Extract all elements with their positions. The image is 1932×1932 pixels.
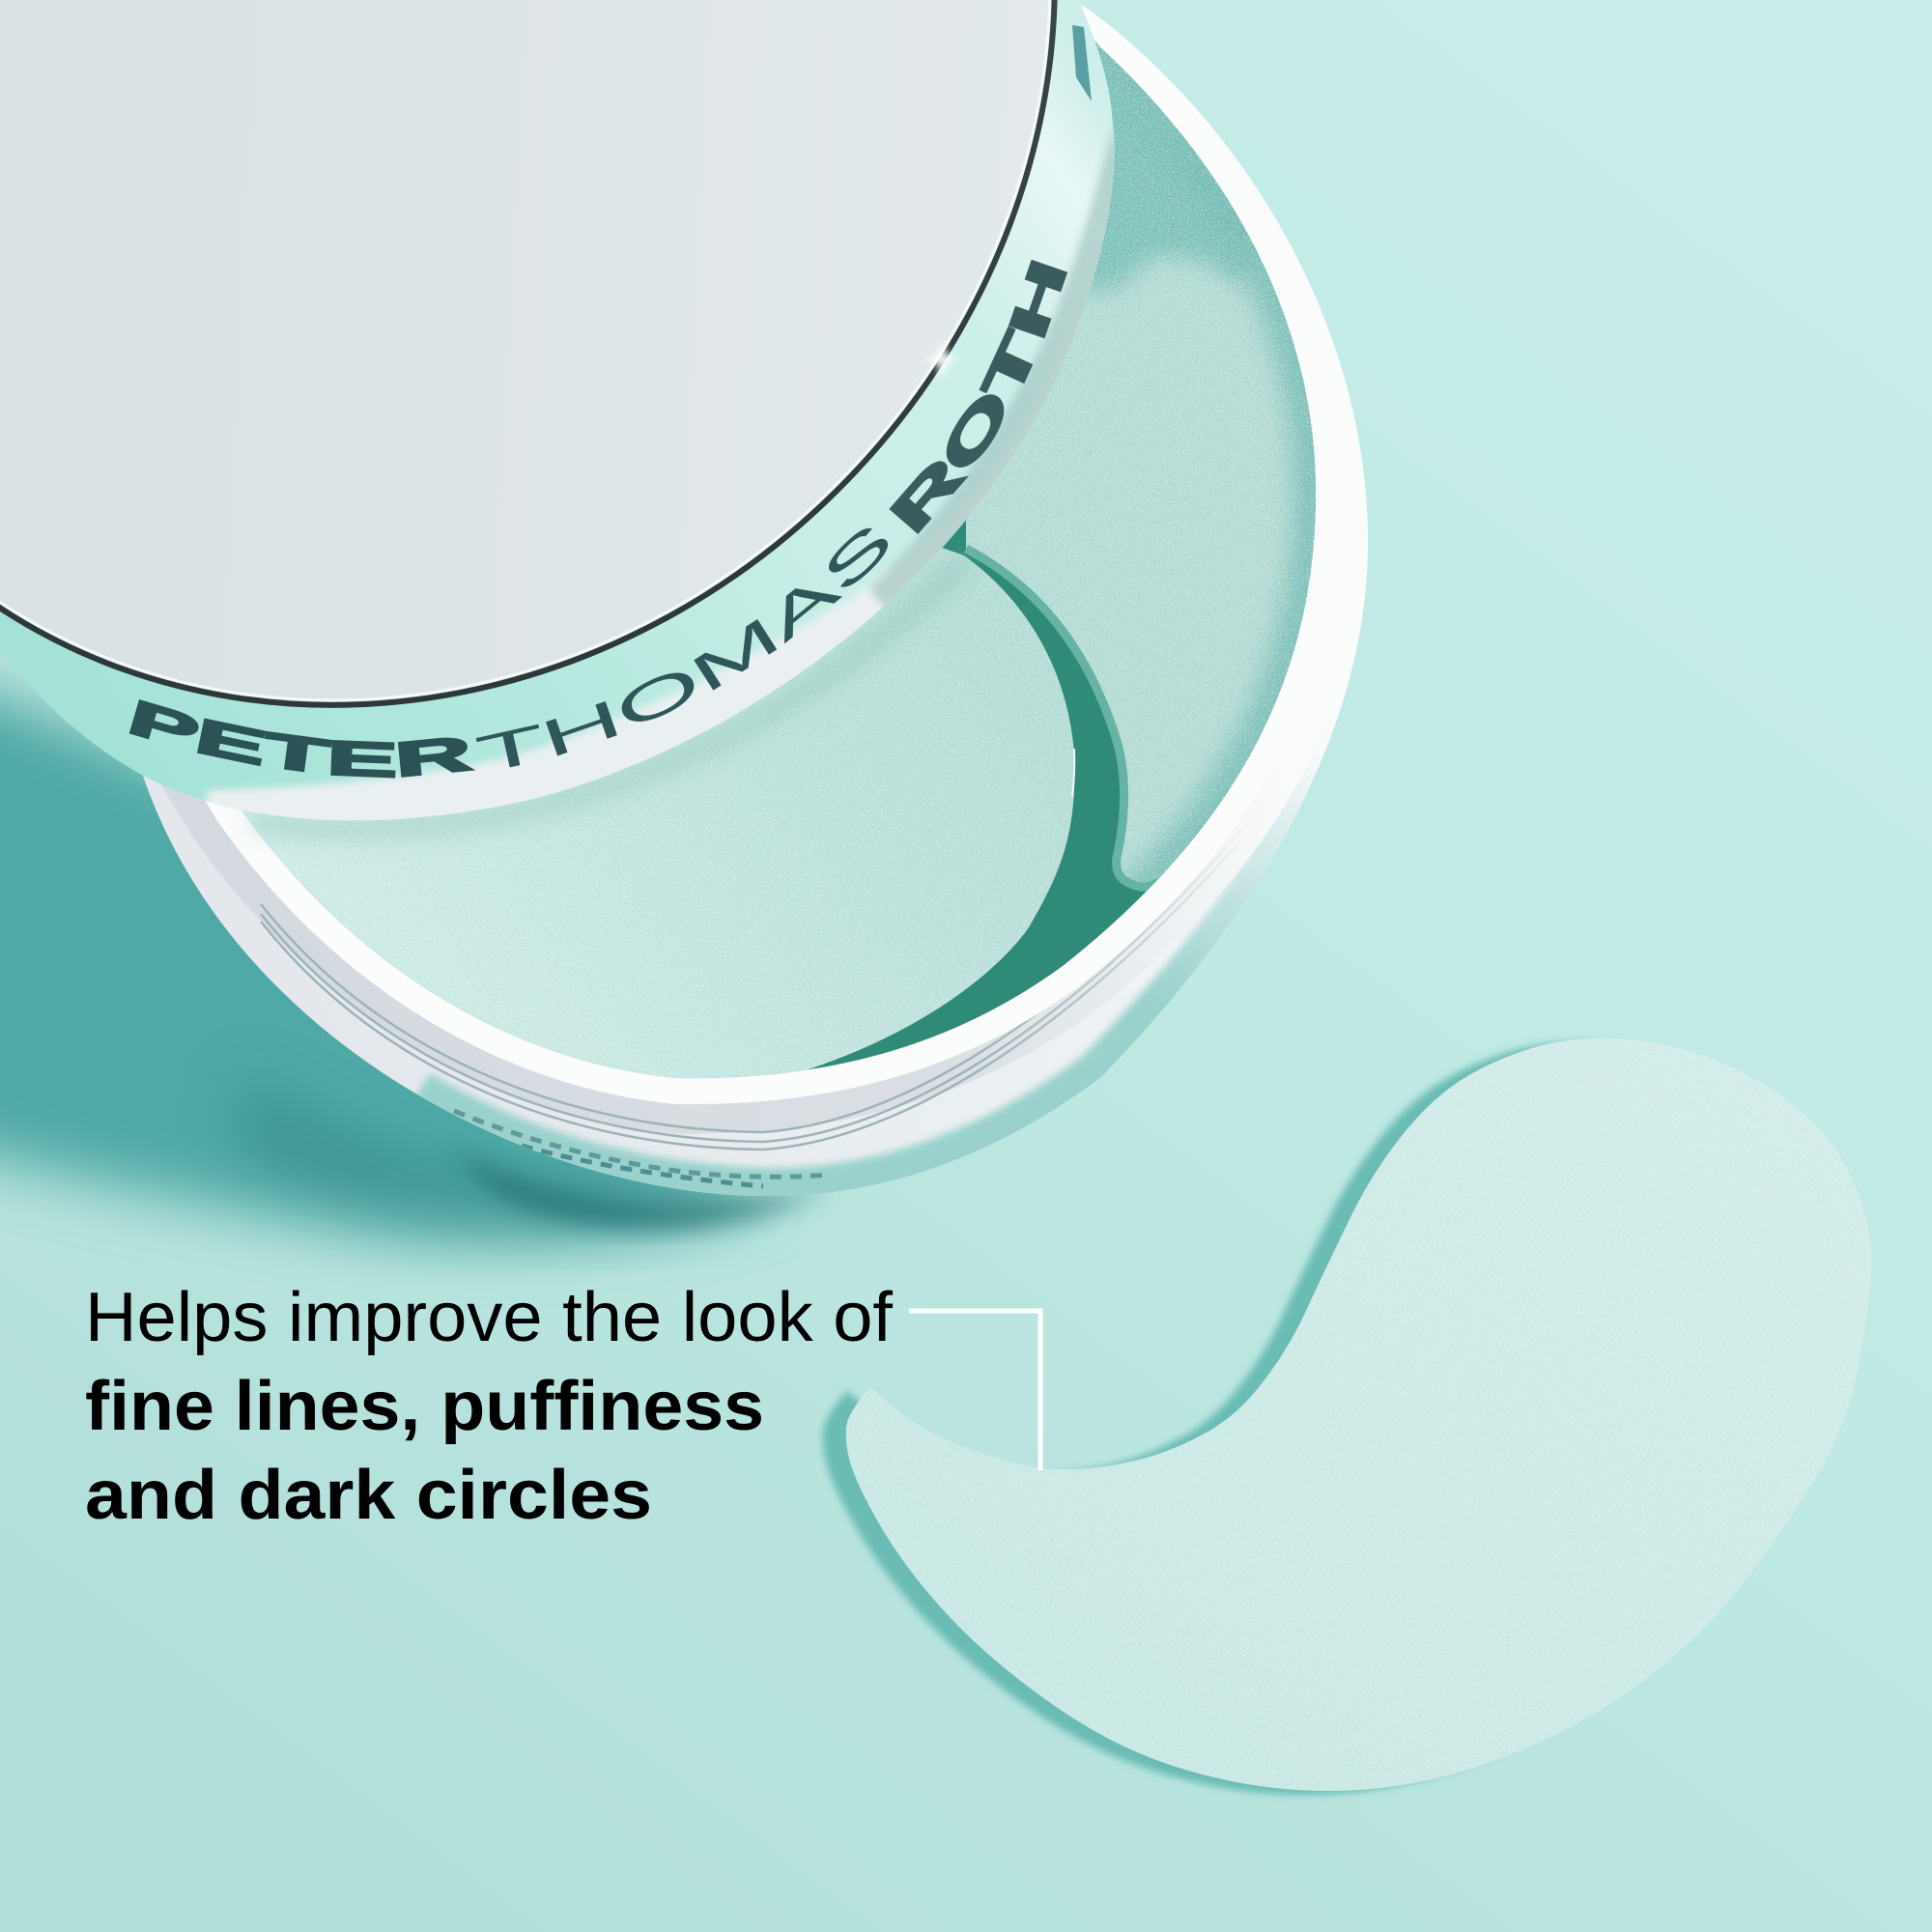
brand: THOMAS: THOMAS xyxy=(475,527,889,767)
upper right patch xyxy=(966,41,1316,883)
patches in jar xyxy=(97,0,1352,1111)
sparkle on upper patch xyxy=(966,39,1323,889)
band reflected lettering top xyxy=(1072,25,1092,101)
jar outer wall xyxy=(126,0,1368,1196)
lid band xyxy=(0,0,1115,820)
lid shadow on patch xyxy=(251,560,966,828)
jar xyxy=(97,0,1368,1196)
teal printed strip at base of wall xyxy=(413,773,1313,1196)
white upper lip xyxy=(184,14,1316,1078)
gap edge highlight xyxy=(964,545,1160,892)
shading on upper patch xyxy=(1087,41,1316,885)
callout line 3: and dark circles xyxy=(85,1457,652,1534)
lower left patch xyxy=(242,548,1074,1078)
patch body xyxy=(846,1038,1871,1791)
band shading layers xyxy=(201,131,1115,821)
jar cavity xyxy=(184,14,1316,1078)
lid metal rim xyxy=(0,0,1325,976)
lid sparkle xyxy=(925,338,960,382)
lip ridge lines xyxy=(261,811,1256,1150)
callout leader line xyxy=(909,1311,1040,1470)
lavender lip band xyxy=(184,14,1316,1078)
band lower white crescent xyxy=(193,309,1159,869)
band shaded crescent right xyxy=(869,126,1159,657)
jar cast shadow xyxy=(0,667,831,1240)
sparkle on lower patch xyxy=(232,541,1082,1092)
brand: PETER: PETER xyxy=(129,699,475,779)
lid xyxy=(0,0,1115,821)
lid top surface xyxy=(0,0,1319,969)
patch shadow xyxy=(823,1042,1848,1795)
patch sparkle xyxy=(831,1024,1884,1806)
callout line 2: fine lines, puffiness xyxy=(85,1368,764,1445)
blurred small print on wall xyxy=(454,1111,831,1177)
callout text xyxy=(85,1279,894,1534)
loose eye patch xyxy=(823,1024,1884,1806)
patch edge glint xyxy=(1072,749,1074,797)
brand: ROTH: ROTH xyxy=(889,259,1068,534)
callout line 1: Helps improve the look of xyxy=(85,1279,894,1356)
